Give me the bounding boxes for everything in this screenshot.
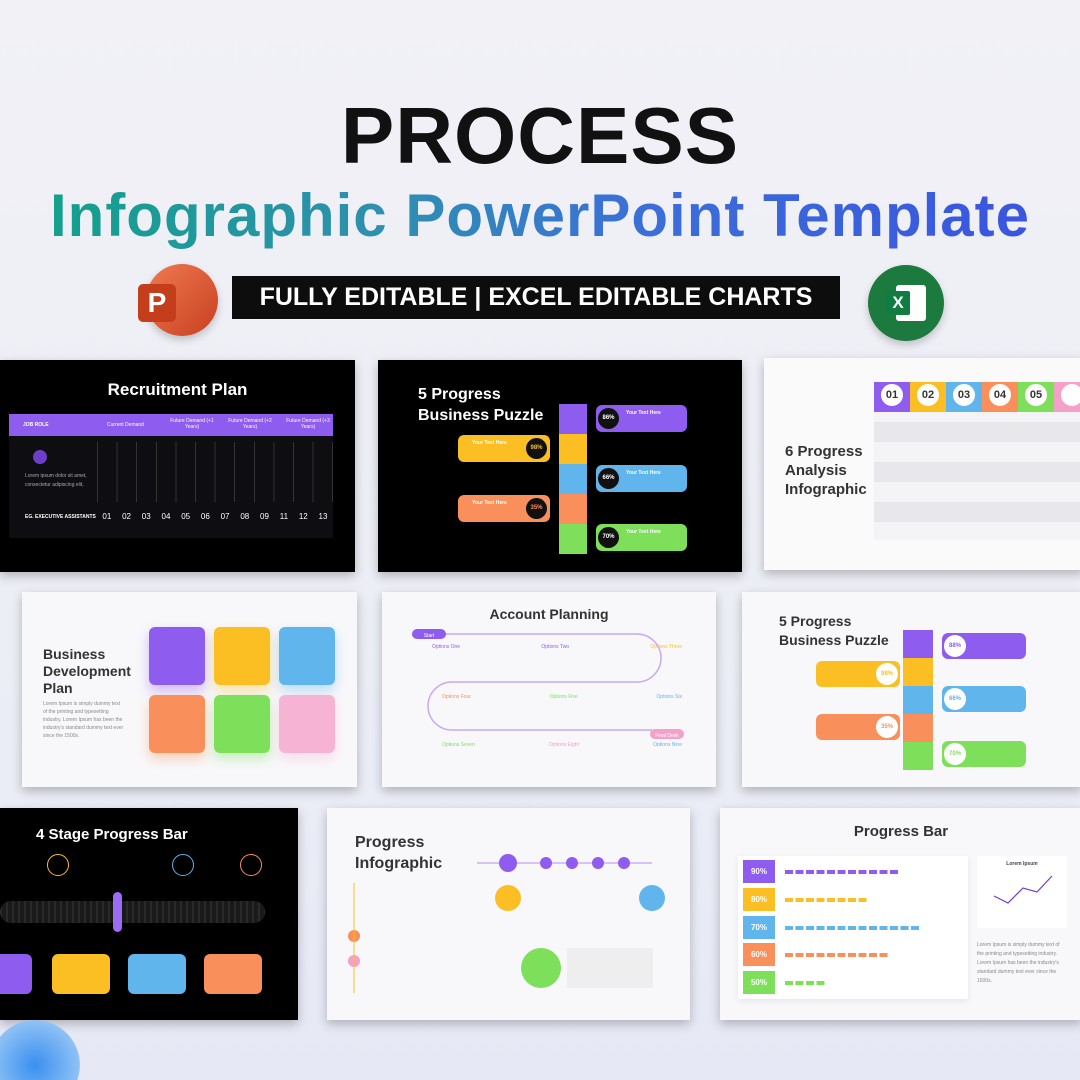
line chart — [977, 856, 1067, 928]
heading: Progress — [355, 834, 424, 851]
callouts left — [458, 435, 550, 462]
table: Lorem ipsum dolor sit amet, consectetur adipiscing elit, — [25, 473, 87, 488]
bars card: 70% — [751, 923, 767, 932]
icon: excel — [868, 265, 944, 341]
table: EG. EXECUTIVE ASSISTANTS — [25, 514, 96, 520]
numbered columns — [874, 382, 1080, 540]
panel: account planning: Options Seven — [442, 742, 475, 748]
callouts left: Your Text Here — [472, 440, 507, 446]
table: 04 — [162, 512, 170, 521]
numbered columns: 01 — [886, 389, 898, 401]
panel: puzzle light: 70% — [949, 751, 961, 757]
heading: Business — [43, 646, 105, 662]
table: 01 — [102, 512, 111, 521]
panel: progress bar — [720, 808, 1080, 1020]
options text: Options Three — [650, 644, 682, 650]
table: 08 — [240, 512, 249, 521]
options text — [432, 644, 682, 650]
decorative blob — [0, 1020, 80, 1080]
panel: account planning: Options Five — [550, 694, 578, 700]
timeline path — [412, 629, 684, 739]
puzzle column — [903, 630, 933, 770]
text block: Lorem Ipsum is simply dummy text of the printing and typesetting industry. Lorem Ipsum has been the industry's standard dummy text ever since the 1500s. — [43, 701, 123, 739]
heading: 4 Stage Progress Bar — [36, 826, 188, 843]
heading: Analysis — [785, 462, 847, 479]
heading — [43, 646, 131, 696]
cards — [142, 626, 342, 766]
panel: puzzle dark: 70% — [602, 534, 614, 540]
heading: 5 Progress — [779, 613, 851, 629]
heading: Development — [43, 663, 131, 679]
bars card: 60% — [751, 950, 767, 959]
panel: puzzle dark — [378, 360, 742, 572]
table: 07 — [221, 512, 230, 521]
table: 03 — [142, 512, 151, 521]
callouts — [942, 633, 1026, 659]
bars card: 90% — [751, 867, 767, 876]
table: 02 — [122, 512, 131, 521]
panel: puzzle dark: 66% — [602, 475, 614, 481]
callouts right: Your Text Here — [626, 410, 661, 416]
heading — [779, 613, 889, 648]
table: 13 — [319, 512, 327, 521]
banner — [232, 276, 840, 319]
flow diagram — [348, 854, 665, 993]
panel: business development plan — [22, 592, 357, 787]
panel: puzzle dark: Your Text Here — [626, 470, 661, 476]
panel: account planning — [382, 592, 716, 787]
panel: puzzle light: 98% — [881, 671, 893, 677]
bar — [0, 901, 265, 923]
timeline path: Start — [424, 633, 435, 639]
heading: Progress Bar — [854, 823, 948, 840]
panel: recruitment plan — [0, 360, 355, 572]
table: Future Demand (+2 Years) — [228, 418, 272, 430]
icon: excel: X — [892, 293, 904, 312]
callouts right — [596, 405, 687, 432]
heading — [418, 386, 543, 424]
options text: Options Two — [541, 644, 569, 650]
heading: Infographic — [355, 855, 442, 872]
title: PROCESS — [341, 91, 739, 180]
panel: account planning: Options Nine — [653, 742, 682, 748]
puzzle column — [559, 404, 587, 554]
table: Current Demand — [107, 422, 144, 428]
numbered columns: 02 — [922, 389, 934, 401]
bars card: 80% — [751, 895, 767, 904]
line chart: Lorem Ipsum — [1006, 861, 1038, 867]
panel: puzzle dark: Your Text Here — [472, 500, 507, 506]
table: 05 — [181, 512, 190, 521]
table: 09 — [260, 512, 269, 521]
stage cards — [0, 954, 32, 994]
heading: Infographic — [785, 481, 867, 498]
callouts right: 86% — [602, 415, 614, 421]
table: 11 — [280, 512, 288, 521]
table: 12 — [299, 512, 308, 521]
table — [9, 414, 333, 538]
table: JOB ROLE — [23, 422, 49, 428]
bars card: 50% — [751, 978, 767, 987]
banner: FULLY EDITABLE | EXCEL EDITABLE CHARTS — [260, 283, 812, 311]
panel: progress infographic — [327, 808, 690, 1020]
panel: account planning: Options Six — [656, 694, 682, 700]
timeline path: Final Desk — [655, 733, 679, 739]
callouts: 88% — [949, 643, 961, 649]
icon: powerpoint: P — [148, 287, 166, 318]
heading: Account Planning — [490, 606, 608, 622]
icons — [47, 854, 69, 876]
callouts left: 98% — [530, 445, 542, 451]
heading — [785, 443, 867, 498]
panel: account planning: Options Eight — [549, 742, 579, 748]
heading: Recruitment Plan — [108, 380, 247, 399]
bars card — [738, 856, 968, 999]
heading: Plan — [43, 680, 73, 696]
panel: account planning: Options Four — [442, 694, 471, 700]
text block: Lorem Ipsum is simply dummy text of the printing and typesetting industry. Lorem Ipsum has been the industry's standard dummy text ever since the 1500s. — [977, 942, 1060, 984]
table: 06 — [201, 512, 210, 521]
panel: 6 progress analysis — [764, 358, 1080, 570]
numbered columns: 05 — [1030, 389, 1042, 401]
panel: 4 stage progress bar — [0, 808, 298, 1020]
heading — [355, 834, 442, 872]
icon: powerpoint — [138, 264, 222, 344]
numbered columns: 04 — [994, 389, 1006, 401]
heading: 5 Progress — [418, 386, 501, 403]
numbered columns: 03 — [958, 389, 970, 401]
table: Future Demand (+1 Years) — [170, 418, 214, 430]
panel: puzzle light: 66% — [949, 696, 961, 702]
heading: Business Puzzle — [418, 407, 543, 424]
subtitle: Infographic PowerPoint Template — [50, 182, 1030, 249]
panel: puzzle light — [742, 592, 1080, 787]
heading: Business Puzzle — [779, 632, 889, 648]
panel: puzzle dark: 35% — [530, 505, 542, 511]
table: Future Demand (+3 Years) — [286, 418, 330, 430]
panel: puzzle dark: Your Text Here — [626, 529, 661, 535]
panel: puzzle light: 35% — [881, 724, 893, 730]
heading: 6 Progress — [785, 443, 863, 460]
options text: Options One — [432, 644, 460, 650]
